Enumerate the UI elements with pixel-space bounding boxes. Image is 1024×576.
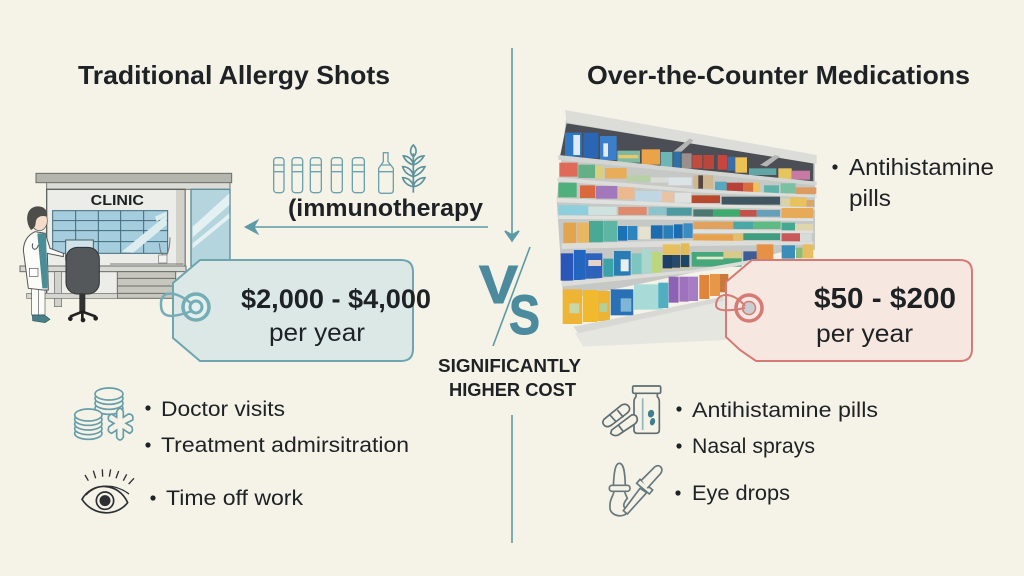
icon: eye <box>82 469 134 513</box>
callout: significantly higher cost <box>438 356 581 400</box>
icon: pills and bottle <box>603 386 661 436</box>
versus mark <box>479 247 540 346</box>
bullets: doctor visits and treatment administration <box>145 397 409 457</box>
row 1 <box>565 133 582 157</box>
bullet: eye drops: Eye drops <box>692 481 790 505</box>
row 3 <box>558 183 577 197</box>
callout: significantly higher cost: SIGNIFICANTLY <box>438 356 581 376</box>
icon: plant sprig <box>403 145 425 193</box>
label: immunotherapy: (immunotherapy <box>288 195 484 222</box>
bullet: antihistamine pills callout: Antihistamine <box>849 154 994 180</box>
icon: eye droppers <box>609 463 662 516</box>
price tag: over-the-counter <box>716 260 972 361</box>
icon row: vials and plant <box>274 145 425 193</box>
row 5 <box>563 223 576 243</box>
row 6 <box>561 253 573 281</box>
title: over-the-counter medications: Over-the-Counter Medications <box>587 60 970 90</box>
illustration: clinic with doctor <box>20 173 232 323</box>
price: 50 to 200: $50 - $200 <box>814 283 956 315</box>
price tag: traditional <box>161 260 431 361</box>
bullets: antihistamine pills and nasal sprays: Antihistamine pills <box>692 398 878 422</box>
price unit: per year <box>269 319 365 347</box>
bullets: antihistamine pills and nasal sprays <box>676 398 878 458</box>
divider: lower centre line <box>511 415 513 543</box>
bullets: antihistamine pills and nasal sprays: Nasal sprays <box>692 434 815 458</box>
icon: tag ring <box>716 295 762 321</box>
versus mark: V <box>479 255 518 315</box>
price: 2000 to 4000: $2,000 - $4,000 <box>241 284 431 314</box>
row 4 <box>558 205 588 215</box>
bullet: antihistamine pills callout <box>832 154 994 211</box>
arrow: pointing left to clinic <box>245 220 488 234</box>
icon: coins and medical asterisk <box>75 388 133 440</box>
illustration: pharmacy shelves <box>557 110 817 347</box>
row 7 <box>563 289 582 324</box>
icon: tag ring <box>161 294 209 320</box>
bullet: antihistamine pills callout: pills <box>849 185 891 211</box>
bullets: doctor visits and treatment administration: Treatment admirsitration <box>161 433 409 457</box>
bullets: doctor visits and treatment administration: Doctor visits <box>161 397 285 421</box>
callout: significantly higher cost: HIGHER COST <box>449 380 576 400</box>
bullet: time off work: Time off work <box>166 486 303 510</box>
versus mark: S <box>509 283 540 346</box>
row 2 <box>559 163 578 177</box>
price unit: per year <box>816 320 913 348</box>
illustration: clinic with doctor: CLINIC <box>91 193 144 209</box>
title: traditional allergy shots: Traditional Allergy Shots <box>78 60 390 90</box>
icon: five vials <box>274 158 364 193</box>
divider arrow: top centre line pointing to VS <box>505 48 519 241</box>
icon: dropper bottle <box>379 153 393 193</box>
